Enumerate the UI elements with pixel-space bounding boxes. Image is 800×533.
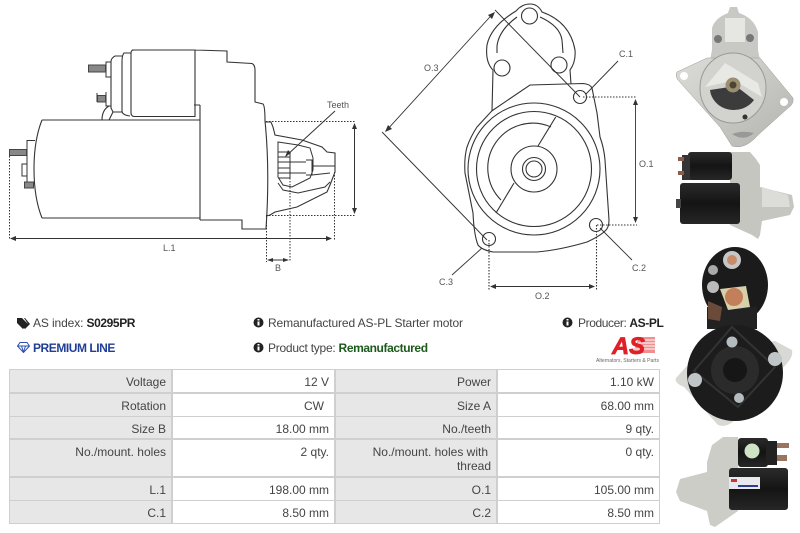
logo: AS <box>596 335 659 364</box>
photo: starter side view, labelled <box>676 437 789 527</box>
row: C.1 and C.2: C.1 <box>147 506 166 520</box>
row: C.1 and C.2: 8.50 mm <box>607 506 654 520</box>
row: rotation and size A: Size A <box>457 399 491 413</box>
icon: info <box>562 318 572 328</box>
rear terminals <box>22 140 35 186</box>
row: mounting holes: No./mount. holes <box>75 445 166 459</box>
row: voltage and power: 1.10 kW <box>610 375 654 389</box>
row: voltage and power: 12 V <box>304 375 329 389</box>
solenoid terminals <box>97 62 111 106</box>
pinion nose <box>278 142 335 193</box>
icon: diamond <box>17 342 30 353</box>
technical drawing: front view <box>382 4 654 300</box>
row: rotation and size A: 68.00 mm <box>601 399 654 413</box>
dimension labels <box>424 49 654 301</box>
row: C.1 and C.2 <box>10 501 659 523</box>
motor body <box>34 105 200 220</box>
dimension labels <box>163 100 367 273</box>
info: AS index: AS index: S0295PR <box>33 316 135 330</box>
housing rings <box>468 103 600 235</box>
dimension labels: Teeth <box>327 100 349 110</box>
info: premium line: PREMIUM LINE <box>33 341 115 355</box>
row: mounting holes: 2 qty. <box>301 445 329 459</box>
logo: AS: Alternators, Starters & Parts <box>596 358 659 364</box>
dimension labels: C.2 <box>632 263 646 273</box>
solenoid <box>102 50 265 121</box>
row: L.1 and O.1 <box>10 478 659 500</box>
row: voltage and power <box>10 370 659 392</box>
row: mounting holes: No./mount. holes with <box>373 445 488 459</box>
row: size B and teeth: No./teeth <box>442 422 491 436</box>
dimension lines <box>10 122 355 262</box>
icon: info <box>254 342 264 352</box>
mount holes <box>574 90 586 104</box>
row: size B and teeth: Size B <box>131 422 166 436</box>
solenoid outline <box>487 4 575 111</box>
dimension labels: O.3 <box>424 63 439 73</box>
icon: tags <box>17 318 30 329</box>
dimension labels: L.1 <box>163 243 176 253</box>
info: producer: Producer: AS-PL <box>578 316 663 330</box>
dimension labels: C.3 <box>439 277 453 287</box>
row: mounting holes: 0 qty. <box>626 445 654 459</box>
row: L.1 and O.1: L.1 <box>149 483 166 497</box>
photo: starter rear view <box>676 247 792 426</box>
housing bottom and flange <box>200 121 335 229</box>
photo: starter side view <box>676 152 794 239</box>
row: voltage and power: Power <box>457 375 491 389</box>
row: L.1 and O.1: 105.00 mm <box>594 483 654 497</box>
dimension labels: C.1 <box>619 49 633 59</box>
row: mounting holes: thread <box>457 458 491 472</box>
technical drawing: side view <box>9 50 357 273</box>
row: rotation and size A: CW <box>304 399 324 413</box>
dimension labels: O.1 <box>639 159 654 169</box>
row: voltage and power: Voltage <box>126 375 166 389</box>
dimension labels: B <box>275 263 281 273</box>
row: size B and teeth: 9 qty. <box>626 422 654 436</box>
row: C.1 and C.2: C.2 <box>472 506 491 520</box>
dimension arrows <box>10 111 357 262</box>
shaft centre <box>511 146 557 192</box>
photo: starter front view <box>676 7 794 148</box>
row: rotation and size A: Rotation <box>121 399 166 413</box>
row: rotation and size A <box>10 394 659 416</box>
row: mounting holes <box>10 440 659 476</box>
row: L.1 and O.1: 198.00 mm <box>269 483 329 497</box>
dimension lines <box>382 10 638 290</box>
row: size B and teeth <box>10 417 659 438</box>
icon: info <box>254 318 264 328</box>
flange plate <box>465 84 609 252</box>
info: product type: Product type: Remanufactured <box>268 341 428 355</box>
info: description: Remanufactured AS-PL Starter motor <box>268 316 463 330</box>
row: L.1 and O.1: O.1 <box>472 483 491 497</box>
row: C.1 and C.2: 8.50 mm <box>282 506 329 520</box>
specification table <box>9 369 660 524</box>
row: size B and teeth: 18.00 mm <box>276 422 329 436</box>
